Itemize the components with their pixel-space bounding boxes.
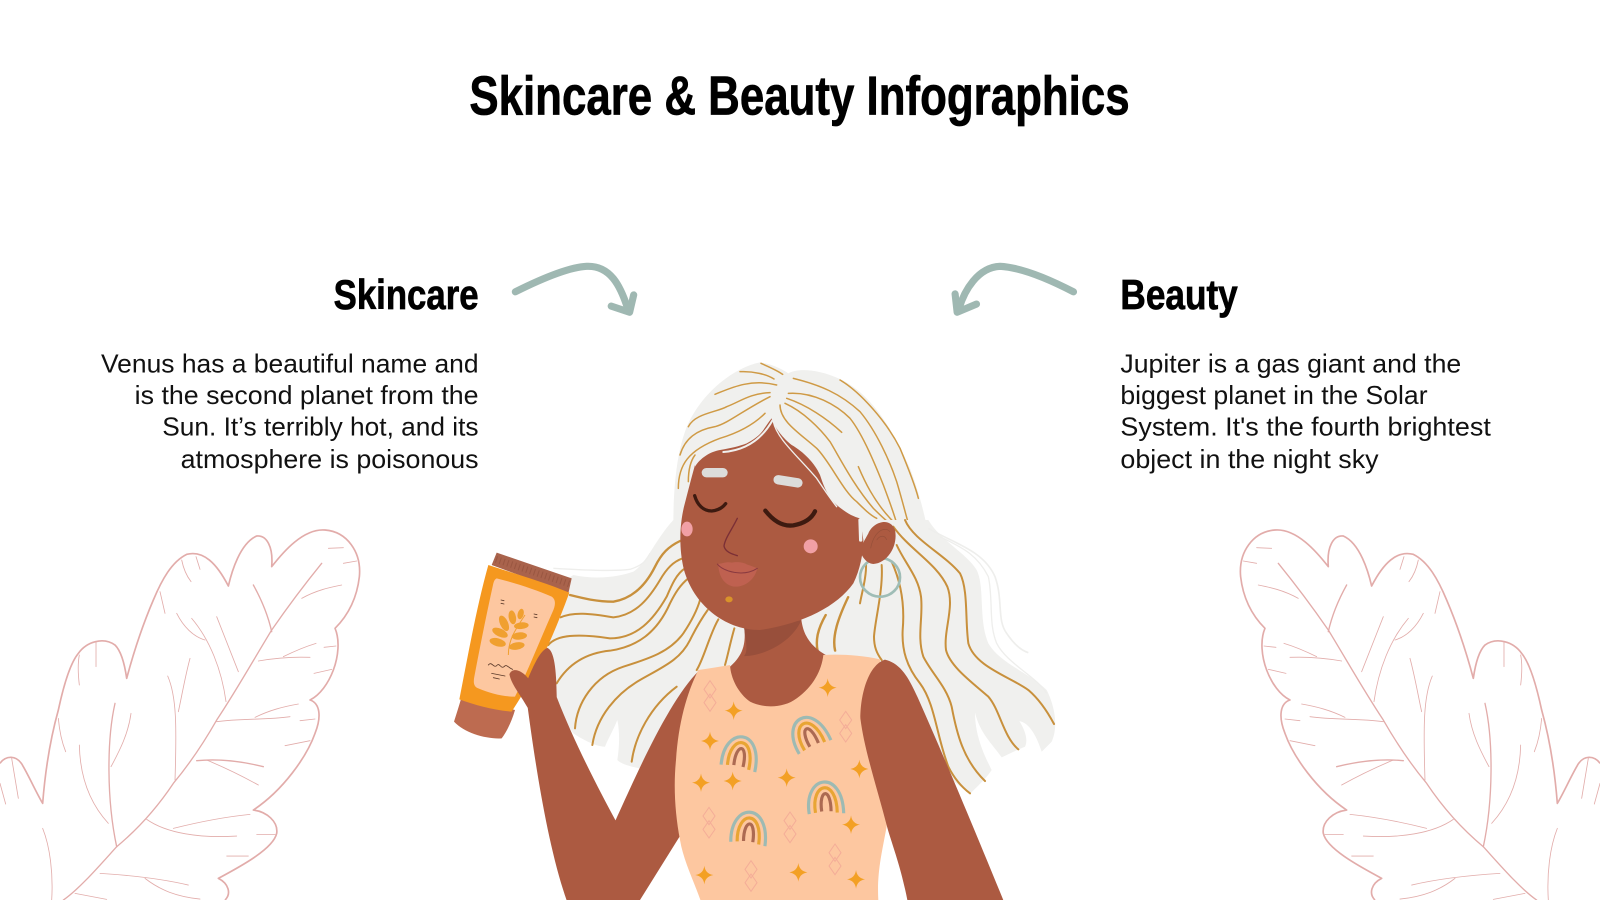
hair: flowing left side <box>540 520 740 768</box>
heading: Beauty: Beauty <box>1120 271 1238 318</box>
product: sunscreen tube <box>454 553 572 738</box>
panel: skincare text <box>101 271 479 474</box>
face shape <box>680 418 863 630</box>
eyebrow highlights <box>702 468 803 488</box>
hair: crown with parted strands <box>673 362 927 525</box>
text block: Jupiter description: Jupiter is a gas giant and the <box>1120 350 1461 378</box>
leaf: left decorative leaf <box>0 530 360 900</box>
text block: Jupiter description: System. It's the fourth brightest <box>1120 414 1491 442</box>
heading: Skincare: Skincare <box>334 271 479 318</box>
text block: Venus description <box>101 350 479 474</box>
pattern: diamonds <box>703 681 852 891</box>
text block: Venus description: is the second planet from the <box>135 382 479 410</box>
text block: Jupiter description <box>1120 350 1491 474</box>
figure: raised left arm holding tube <box>509 648 709 900</box>
pattern: rainbows <box>721 711 844 846</box>
text block: Venus description: Venus has a beautiful name and <box>101 350 479 378</box>
arrow: right curved arrow <box>955 266 1073 312</box>
ear <box>860 522 896 564</box>
hair: strands under chin <box>817 597 848 651</box>
illustration: woman with sunscreen tube <box>454 362 1055 900</box>
nose <box>724 518 737 556</box>
panel: beauty text <box>1120 271 1491 474</box>
hair: central fill behind face <box>714 510 883 684</box>
figure: neck <box>726 619 828 711</box>
icon: leaf sprig on tube label <box>489 608 529 655</box>
arrow: left curved arrow <box>515 266 634 312</box>
pattern: stars <box>692 678 868 889</box>
figure: right arm <box>860 660 1003 900</box>
text block: Venus description: atmosphere is poisonous <box>181 446 479 474</box>
text block: Jupiter description: object in the night sky <box>1120 446 1379 474</box>
dress with rainbow and star pattern <box>675 655 887 900</box>
closed eyes <box>695 496 815 526</box>
text block: Venus description: Sun. It’s terribly hot, and its <box>162 414 479 442</box>
cheeks <box>681 522 818 553</box>
title: Skincare & Beauty Infographics <box>469 64 1130 126</box>
lips <box>717 562 757 587</box>
mole <box>725 596 733 602</box>
earring: hoop <box>860 558 900 597</box>
hair parting strands over forehead <box>723 420 861 540</box>
text block: Jupiter description: biggest planet in the Solar <box>1120 382 1428 410</box>
hair: flowing right side <box>860 520 1055 794</box>
face with closed eyes, cheeks, lips and earring <box>680 418 900 630</box>
leaf: right decorative leaf <box>1240 530 1600 900</box>
